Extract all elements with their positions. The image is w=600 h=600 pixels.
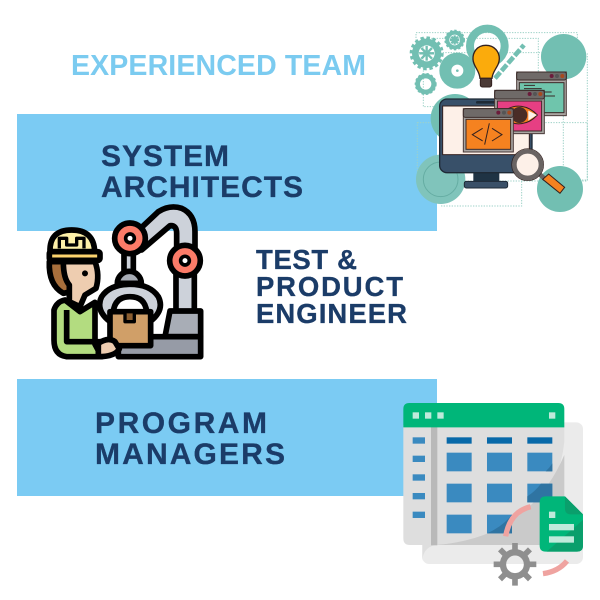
heading: system architects: SYSTEM	[101, 140, 229, 173]
gears	[411, 29, 505, 94]
pink arc	[506, 507, 567, 574]
heading: program managers: PROGRAM	[95, 407, 267, 440]
eye window	[495, 90, 544, 134]
base	[165, 311, 201, 337]
heading: program managers: MANAGERS	[95, 438, 285, 471]
icon: worker with robotic arm	[49, 207, 201, 357]
heading: program managers	[95, 407, 285, 471]
gear	[494, 543, 536, 586]
heading: test and product engineer	[256, 244, 407, 329]
worker	[49, 262, 72, 293]
panel: system architects band	[17, 114, 437, 231]
robot arm	[130, 207, 195, 260]
monitor	[473, 172, 499, 182]
box	[110, 312, 151, 346]
header bar	[403, 403, 564, 427]
icon: spreadsheet with document and gear	[403, 403, 583, 586]
heading: system architects	[101, 140, 303, 204]
heading: test and product engineer: PRODUCT	[256, 271, 403, 302]
magnifier	[539, 174, 545, 179]
bulb	[473, 45, 499, 78]
table cells	[413, 437, 552, 533]
code window	[463, 109, 513, 152]
icon: software development illustration	[411, 29, 587, 212]
heading: test and product engineer: ENGINEER	[256, 298, 407, 329]
title: EXPERIENCED TEAM	[71, 50, 366, 82]
heading: system architects: ARCHITECTS	[101, 171, 303, 204]
gripper	[100, 284, 160, 322]
document	[540, 496, 583, 552]
right window	[517, 72, 566, 116]
decorative teal shapes	[416, 34, 586, 212]
panel: program managers band	[17, 379, 437, 496]
heading: test and product engineer: TEST &	[256, 244, 357, 275]
